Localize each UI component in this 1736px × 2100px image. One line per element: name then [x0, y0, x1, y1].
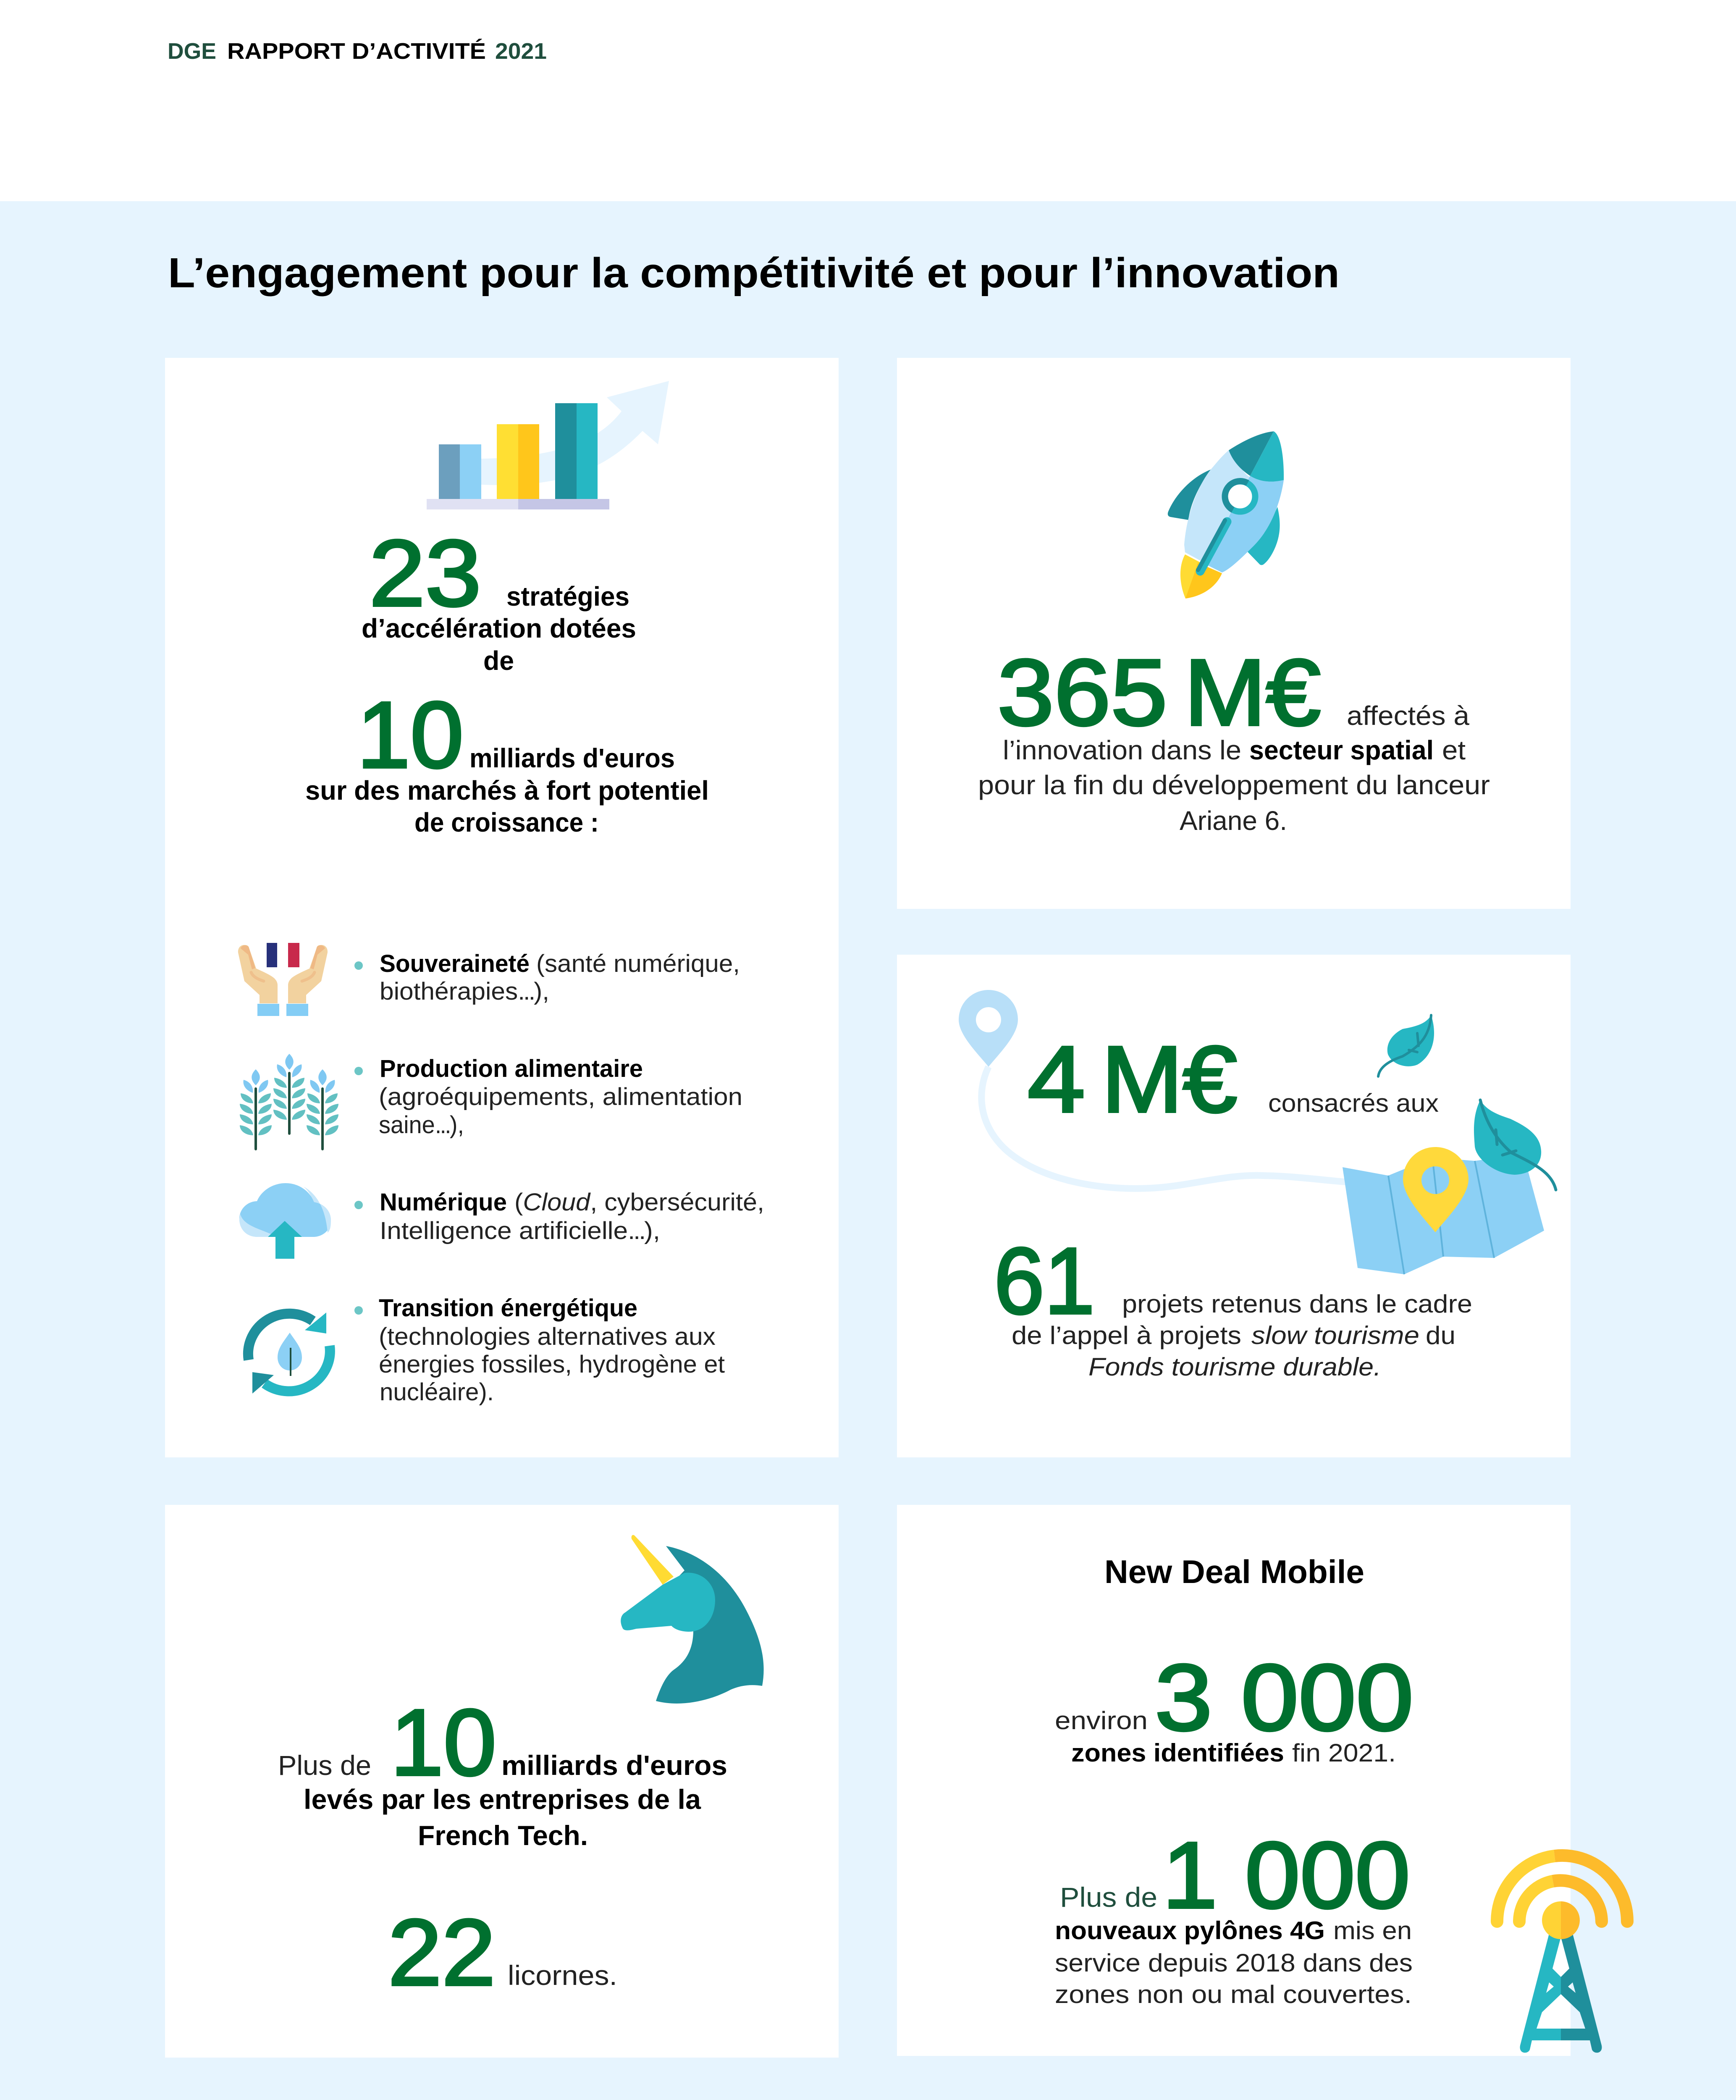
list item: Souveraineté — [354, 950, 740, 1005]
stat: 1 000 pylônes: Plus de — [1060, 1882, 1157, 1913]
stat: 1 000 pylônes — [1055, 1823, 1413, 2008]
stat: 3 000 zones: 3 000 — [1155, 1645, 1413, 1750]
icon: signal tower — [1491, 1856, 1634, 2053]
icon: small leaf — [1378, 1015, 1434, 1076]
list item: Numérique: Numérique — [380, 1189, 507, 1216]
icon: wheat — [240, 1054, 338, 1149]
list item: Production alimentaire — [354, 1055, 742, 1139]
list item: Transition énergétique: (technologies alternatives aux — [379, 1323, 716, 1350]
running header: RAPPORT D’ACTIVITÉ — [227, 39, 486, 64]
route line — [981, 1067, 1345, 1189]
stat: 10 milliards d'euros: 10 — [357, 682, 464, 788]
stat: 10 milliards levés: milliards d'euros — [501, 1750, 727, 1781]
panel background — [897, 1505, 1571, 2056]
stat: 3 000 zones: fin 2021. — [1292, 1739, 1396, 1767]
stat: 61 projets: projets retenus dans le cadre — [1122, 1290, 1472, 1318]
stat: 61 projets: Fonds tourisme durable. — [1088, 1353, 1381, 1381]
icon: hands holding French flag — [238, 943, 328, 1016]
description: secteur spatial: pour la fin du développement du lanceur — [978, 770, 1490, 800]
list item: Production alimentaire: saine...), — [379, 1111, 464, 1139]
stat: 10 milliards d'euros: de croissance : — [414, 807, 599, 837]
stat: 23 stratégies — [362, 521, 636, 676]
list item: Transition énergétique: Transition énergétique — [379, 1294, 637, 1322]
panel background — [897, 358, 1571, 909]
stat: 365 M€ — [997, 640, 1321, 745]
stat: 3 000 zones — [1055, 1645, 1413, 1767]
stat: 1 000 pylônes: zones non ou mal couvertes. — [1055, 1980, 1412, 2008]
stat: 23 stratégies: 23 — [369, 521, 481, 626]
icon: unicorn — [621, 1535, 764, 1704]
stat: 10 milliards levés: levés par les entreprises de la — [304, 1784, 701, 1815]
stat: 10 milliards d'euros: milliards d'euros — [469, 743, 675, 773]
stat: 61 projets: du — [1426, 1321, 1455, 1349]
panel background — [165, 1505, 839, 2058]
icon: rocket — [1168, 431, 1284, 598]
description: secteur spatial: affectés à — [1347, 701, 1469, 731]
panel: secteur spatial — [897, 358, 1571, 909]
stat: 4 M€: consacrés aux — [1268, 1089, 1439, 1117]
stat: 365 M€: 365 — [997, 640, 1167, 745]
stat: 23 stratégies: de — [483, 646, 514, 676]
stat: 4 M€: 4 — [1028, 1027, 1085, 1132]
list item: Numérique: Intelligence artificielle ...), — [380, 1217, 660, 1244]
icon: folded map with pin — [1343, 1147, 1544, 1274]
stat: 10 milliards levés: French Tech. — [418, 1820, 588, 1851]
stat: 61 projets: de l’appel à projets — [1012, 1321, 1241, 1349]
description: secteur spatial: et — [1442, 735, 1466, 765]
stat: 22 licornes: licornes. — [508, 1960, 617, 1991]
panel: stratégies d'accélération — [165, 358, 839, 1457]
panel heading: New Deal Mobile — [1104, 1553, 1364, 1590]
list item: Transition énergétique — [354, 1294, 725, 1406]
stat: 3 000 zones: environ — [1055, 1706, 1148, 1735]
stat: 23 stratégies: stratégies — [506, 581, 629, 612]
description: secteur spatial: Ariane 6. — [1180, 806, 1287, 836]
icon: energy cycle — [248, 1312, 330, 1394]
list item: Numérique — [354, 1189, 764, 1244]
stat: 1 000 pylônes: nouveaux pylônes 4G — [1055, 1916, 1325, 1945]
stat: 365 M€: M€ — [1184, 640, 1321, 745]
icon: cloud upload — [239, 1183, 331, 1259]
list item: Production alimentaire: (agroéquipements, alimentation — [379, 1083, 742, 1110]
panel background — [165, 358, 839, 1457]
stat: 3 000 zones: zones identifiées — [1071, 1739, 1284, 1767]
panel: New Deal Mobile — [897, 1505, 1634, 2056]
description: secteur spatial: secteur spatial — [1249, 735, 1434, 765]
panel background — [897, 955, 1571, 1457]
running header: DGE — [168, 39, 216, 64]
stat: 1 000 pylônes: service depuis 2018 dans des — [1055, 1949, 1413, 1977]
running header: 2021 — [495, 39, 547, 64]
description: secteur spatial — [978, 701, 1490, 836]
icon: growth bar chart — [427, 381, 669, 509]
stat: 22 licornes — [388, 1900, 617, 2005]
list item: Transition énergétique: nucléaire). — [380, 1378, 494, 1406]
stat: 4 M€: M€ — [1101, 1027, 1237, 1132]
stat: 10 milliards levés: 10 — [391, 1690, 496, 1795]
stat: 1 000 pylônes: mis en — [1333, 1916, 1412, 1945]
running header — [168, 39, 547, 64]
stat: 22 licornes: 22 — [388, 1900, 496, 2005]
list item: Souveraineté: (santé numérique, — [536, 950, 740, 977]
icon: start pin — [959, 990, 1018, 1067]
panel: French Tech — [165, 1505, 839, 2058]
description: secteur spatial: l’innovation dans le — [1003, 735, 1241, 765]
list item: Numérique: (Cloud, cybersécurité, — [514, 1189, 764, 1216]
stat: 1 000 pylônes: 1 000 — [1162, 1823, 1410, 1928]
panel: slow tourisme — [897, 955, 1571, 1457]
stat: 10 milliards d'euros — [305, 682, 709, 837]
stat: 61 projets: slow tourisme — [1251, 1321, 1419, 1349]
stat: 23 stratégies: d’accélération dotées — [362, 613, 636, 643]
stat: 10 milliards d'euros: sur des marchés à fort potentiel — [305, 775, 709, 806]
list item: Souveraineté: biothérapies...), — [380, 978, 549, 1005]
title: L’engagement pour la compétitivité et pour l’innovation — [168, 249, 1340, 297]
icon: large leaf — [1474, 1100, 1556, 1190]
list item: Transition énergétique: énergies fossiles, hydrogène et — [379, 1351, 725, 1378]
list item: Production alimentaire: Production alimentaire — [380, 1055, 643, 1082]
stat: 4 M€ — [1028, 1027, 1439, 1132]
stat: 61 projets — [994, 1228, 1472, 1381]
stat: 10 milliards levés — [278, 1690, 727, 1851]
stat: 10 milliards levés: Plus de — [278, 1750, 371, 1781]
list item: Souveraineté: Souveraineté — [380, 950, 530, 977]
stat: 61 projets: 61 — [994, 1228, 1095, 1334]
